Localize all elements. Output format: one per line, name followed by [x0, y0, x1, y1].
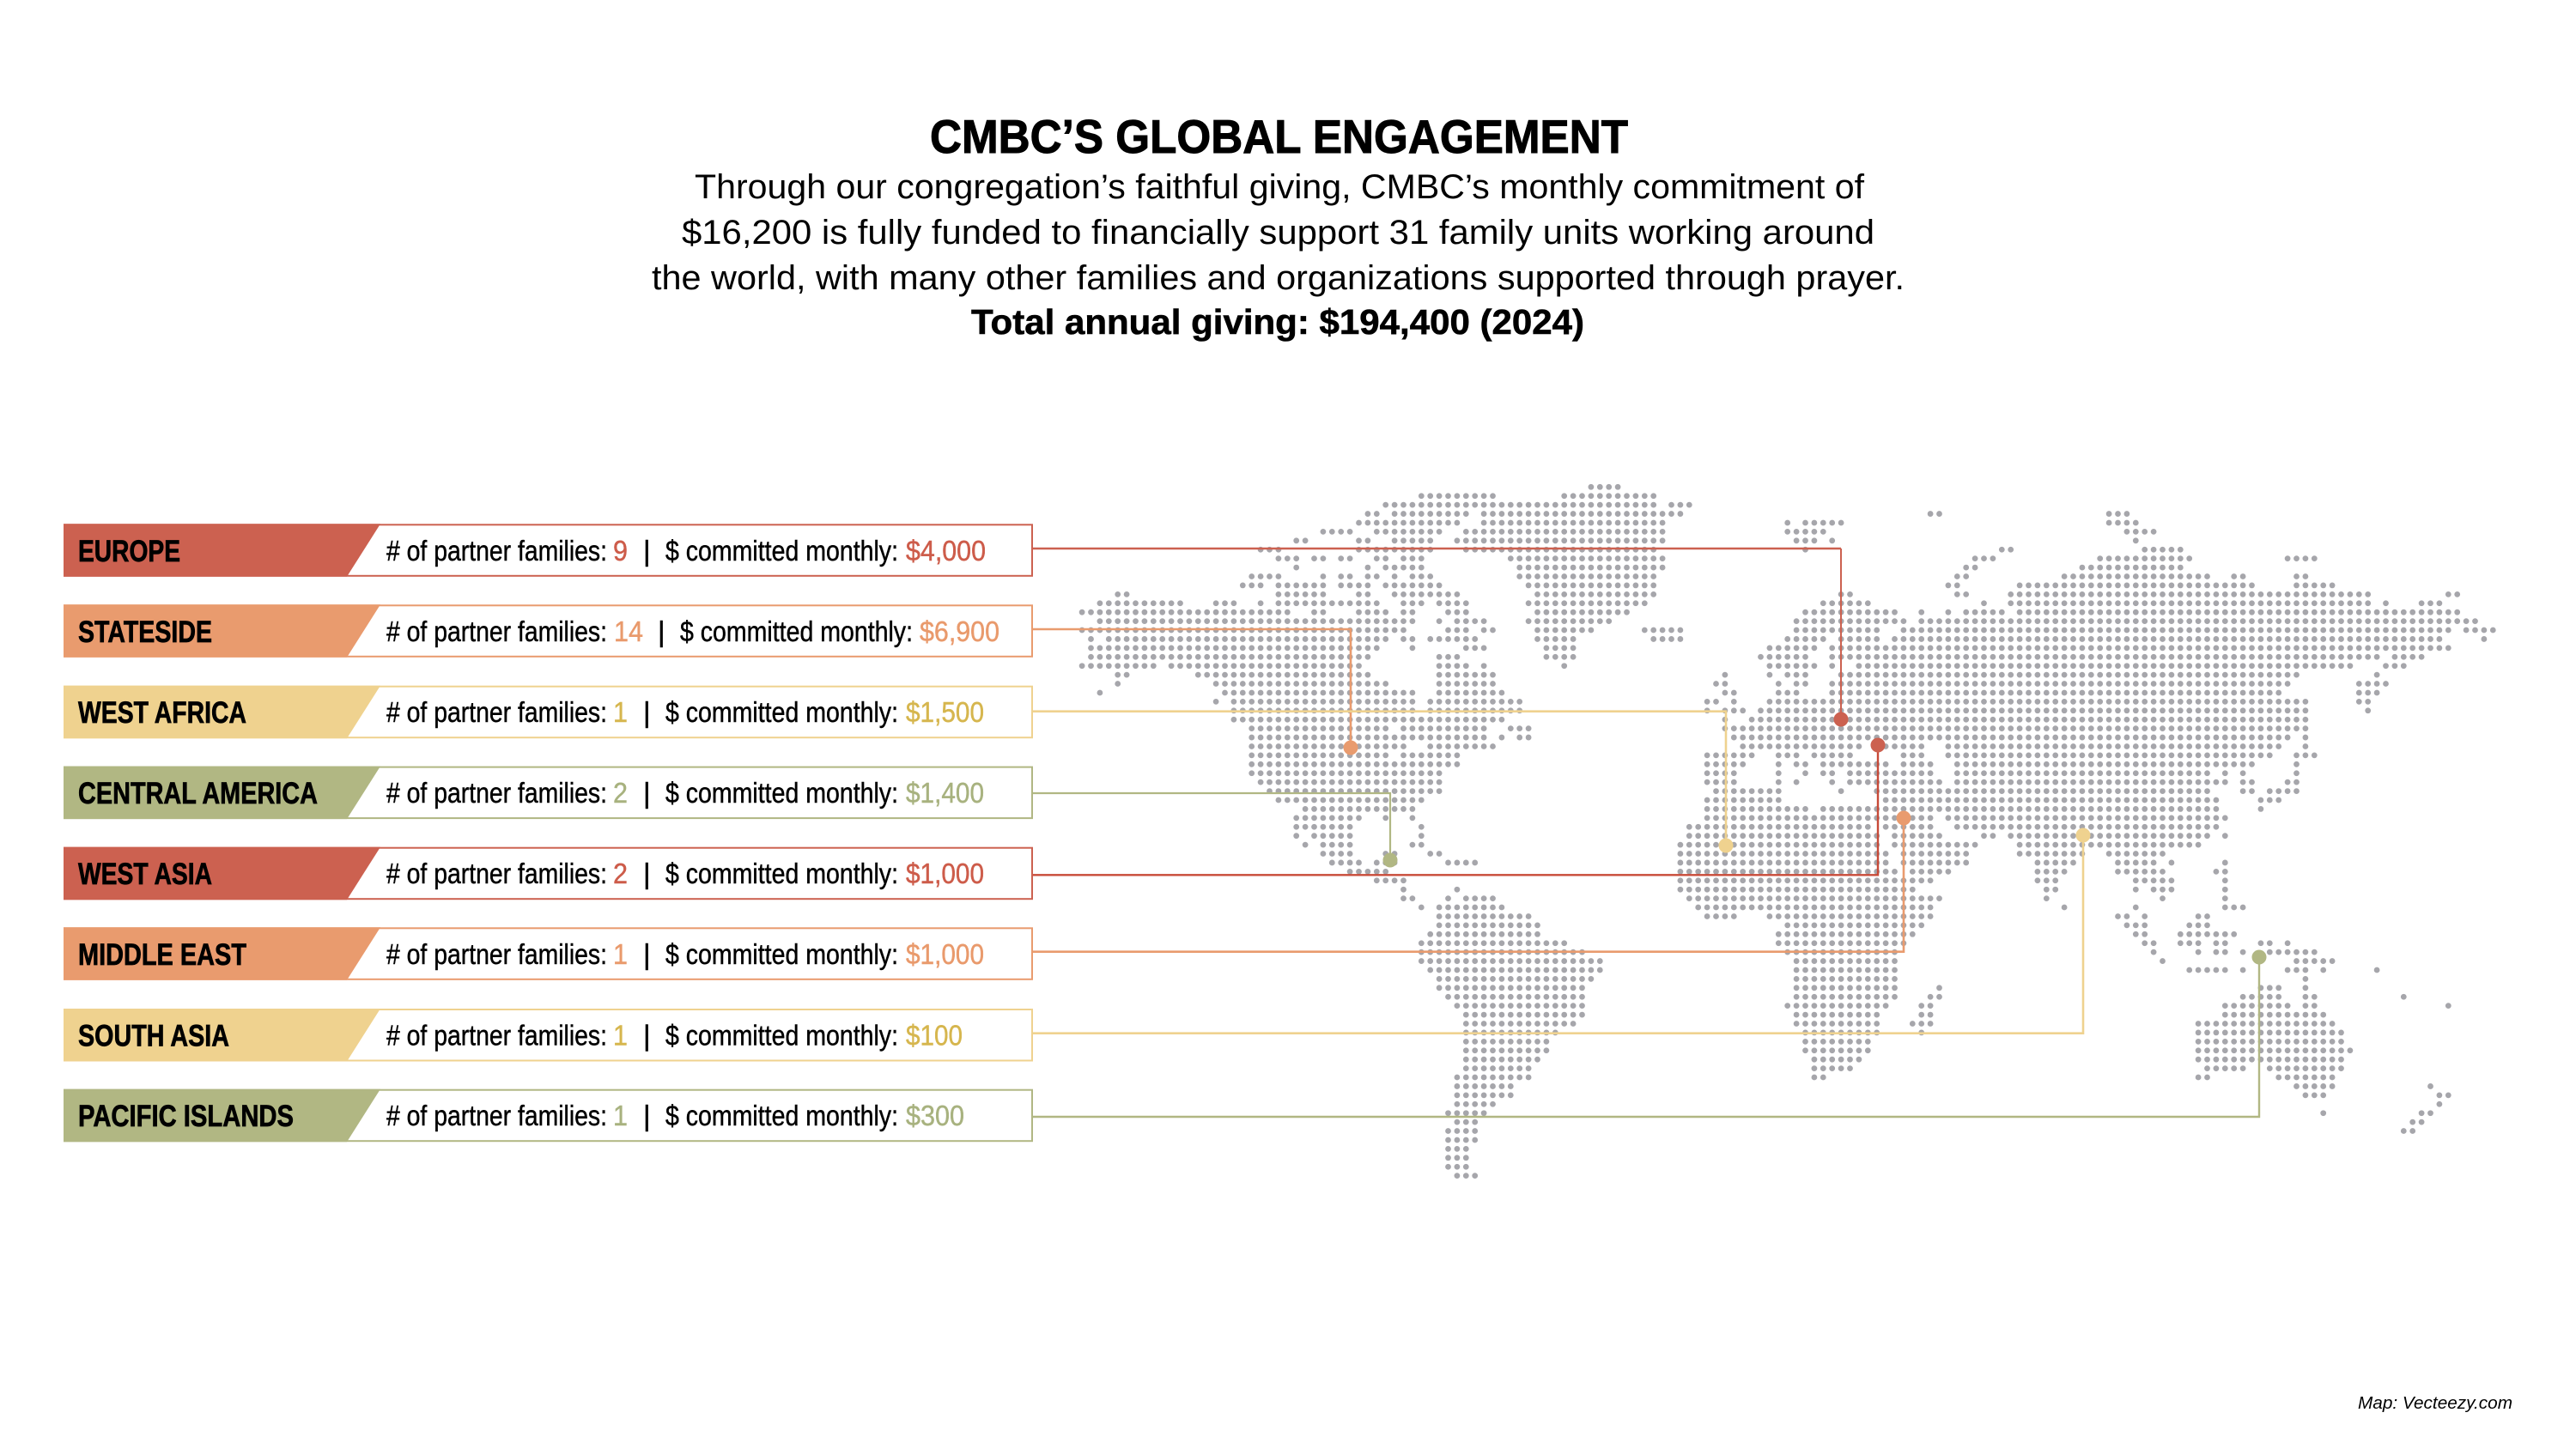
connector: Europe: [1030, 549, 1848, 726]
panel: Central America: [64, 767, 1032, 819]
dot world map: [1082, 487, 2493, 1176]
intro paragraph: Through our congregation’s faithful giving, CMBC’s monthly commitment of: [695, 168, 1865, 206]
panel: West Africa: $1,500: [906, 696, 984, 728]
title: CMBC’S GLOBAL ENGAGEMENT: [930, 110, 1628, 163]
panel: Stateside: |: [658, 615, 665, 647]
connector: Stateside: [1030, 629, 1358, 755]
panel: Middle East: |: [643, 938, 651, 970]
panel: West Asia: 2: [613, 858, 628, 889]
panel: Europe: # of partner families:: [386, 535, 607, 567]
intro paragraph: $16,200 is fully funded to financially support 31 family units working around: [682, 214, 1874, 252]
panel: South Asia: 1: [613, 1020, 628, 1051]
total annual giving: Total annual giving: $194,400 (2024): [971, 302, 1584, 342]
panel: Central America: # of partner families:: [386, 777, 607, 809]
connector: Middle East: [1030, 810, 1911, 952]
panel: Central America: $ committed monthly:: [665, 777, 898, 809]
panel: South Asia: [64, 1009, 1032, 1061]
panel: Stateside: STATESIDE: [78, 615, 212, 649]
panel: Europe: EUROPE: [78, 535, 180, 568]
panel: Middle East: MIDDLE EAST: [78, 938, 246, 972]
panel: Central America: |: [643, 777, 651, 809]
panel: Central America: $1,400: [906, 777, 984, 809]
panel: Europe: $ committed monthly:: [665, 535, 898, 567]
connector: West Africa: [1030, 712, 1733, 853]
map credit: Map: Vecteezy.com: [2358, 1393, 2512, 1413]
panel: Middle East: $1,000: [906, 938, 984, 970]
panel: Stateside: [64, 604, 1032, 658]
panel: Europe: $4,000: [906, 535, 986, 567]
panel: Pacific Islands: $ committed monthly:: [665, 1100, 898, 1131]
panel: South Asia: # of partner families:: [386, 1020, 607, 1051]
connector: South Asia: [1030, 828, 2090, 1034]
intro paragraph: [652, 168, 1905, 297]
panel: Stateside: 14: [614, 615, 643, 647]
panel: South Asia: $100: [906, 1020, 963, 1051]
connector: West Asia: [1030, 738, 1886, 875]
panel: South Asia: SOUTH ASIA: [78, 1020, 229, 1052]
panel: West Africa: 1: [613, 696, 628, 728]
panel: West Asia: $1,000: [906, 858, 984, 889]
panel: Europe: |: [643, 535, 651, 567]
panel: Middle East: 1: [613, 938, 628, 970]
panel: Middle East: [64, 927, 1032, 980]
panel: South Asia: |: [643, 1020, 651, 1051]
panel: West Asia: # of partner families:: [386, 858, 607, 889]
panel: West Africa: [64, 686, 1032, 738]
panel: Pacific Islands: $300: [906, 1100, 964, 1131]
panel: West Asia: |: [643, 858, 651, 889]
panel: Stateside: $ committed monthly:: [680, 615, 913, 647]
panel: Central America: CENTRAL AMERICA: [78, 777, 318, 810]
connector: Pacific Islands: [1030, 949, 2267, 1117]
panel: Pacific Islands: # of partner families:: [386, 1100, 607, 1131]
panel: Pacific Islands: 1: [613, 1100, 628, 1131]
panel: West Asia: [64, 847, 1032, 900]
panel: Middle East: # of partner families:: [386, 938, 607, 970]
panel: West Asia: $ committed monthly:: [665, 858, 898, 889]
panel: Europe: 9: [613, 535, 628, 567]
panel: Pacific Islands: [64, 1089, 1032, 1142]
panel: Europe: [64, 524, 1032, 577]
panel: Pacific Islands: |: [643, 1100, 651, 1131]
panel: Stateside: # of partner families:: [386, 615, 607, 647]
intro paragraph: the world, with many other families and organizations supported through prayer.: [652, 259, 1905, 297]
panel: Central America: 2: [613, 777, 628, 809]
panel: West Asia: WEST ASIA: [78, 858, 212, 891]
panel: West Africa: $ committed monthly:: [665, 696, 898, 728]
panel: Pacific Islands: PACIFIC ISLANDS: [78, 1100, 294, 1133]
connector: Central America: [1030, 793, 1398, 867]
panel: West Africa: # of partner families:: [386, 696, 607, 728]
panel: West Africa: WEST AFRICA: [78, 696, 246, 730]
panel: West Africa: |: [643, 696, 651, 728]
panel: Middle East: $ committed monthly:: [665, 938, 898, 970]
panel: Stateside: $6,900: [920, 615, 999, 647]
panel: South Asia: $ committed monthly:: [665, 1020, 898, 1051]
